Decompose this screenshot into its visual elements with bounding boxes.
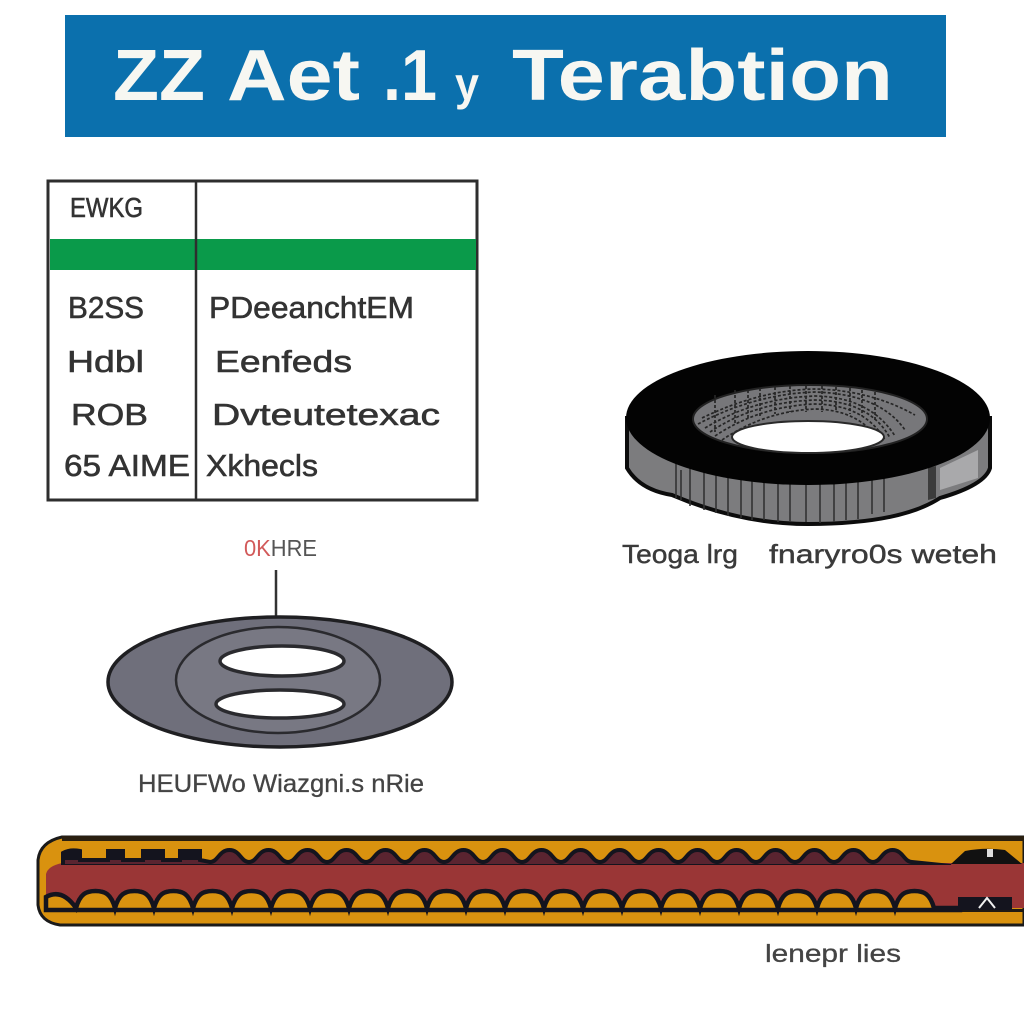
panel: data table: ROB (71, 397, 148, 432)
toothed belt (38, 836, 1024, 925)
belt caption: lenepr lies (765, 940, 901, 968)
panel: data table: EWKG (70, 192, 143, 223)
panel: data table: B2SS (68, 290, 144, 325)
leader line (275, 570, 277, 617)
panel: data table: PDeeanchtEM (209, 290, 414, 325)
panel: data table: Dvteutetexac (212, 397, 440, 432)
panel: data table: Xkhecls (206, 448, 318, 483)
icon: thick black ring (626, 351, 990, 524)
title banner: y (455, 58, 479, 110)
panel: data table: Eenfeds (215, 344, 352, 379)
title banner (65, 15, 946, 137)
disc top label: 0KHRE (244, 535, 317, 561)
belt top teeth (63, 850, 951, 866)
panel: data table (48, 181, 477, 500)
title banner: .1 (383, 36, 437, 116)
ring caption: Teoga lrg (622, 539, 738, 569)
panel: data table: Hdbl (67, 344, 144, 379)
title banner: Terabtion (512, 36, 893, 116)
title banner: Aet (227, 36, 360, 116)
title banner: ZZ (113, 36, 205, 116)
ring caption (622, 539, 997, 569)
panel: data table: 65 AIME (64, 448, 190, 483)
icon: flat disc with two holes (108, 617, 452, 747)
disc caption: HEUFWo Wiazgni.s nRie (138, 770, 424, 798)
ring caption: fnaryro0s weteh (769, 539, 997, 569)
belt bottom teeth (46, 891, 960, 910)
